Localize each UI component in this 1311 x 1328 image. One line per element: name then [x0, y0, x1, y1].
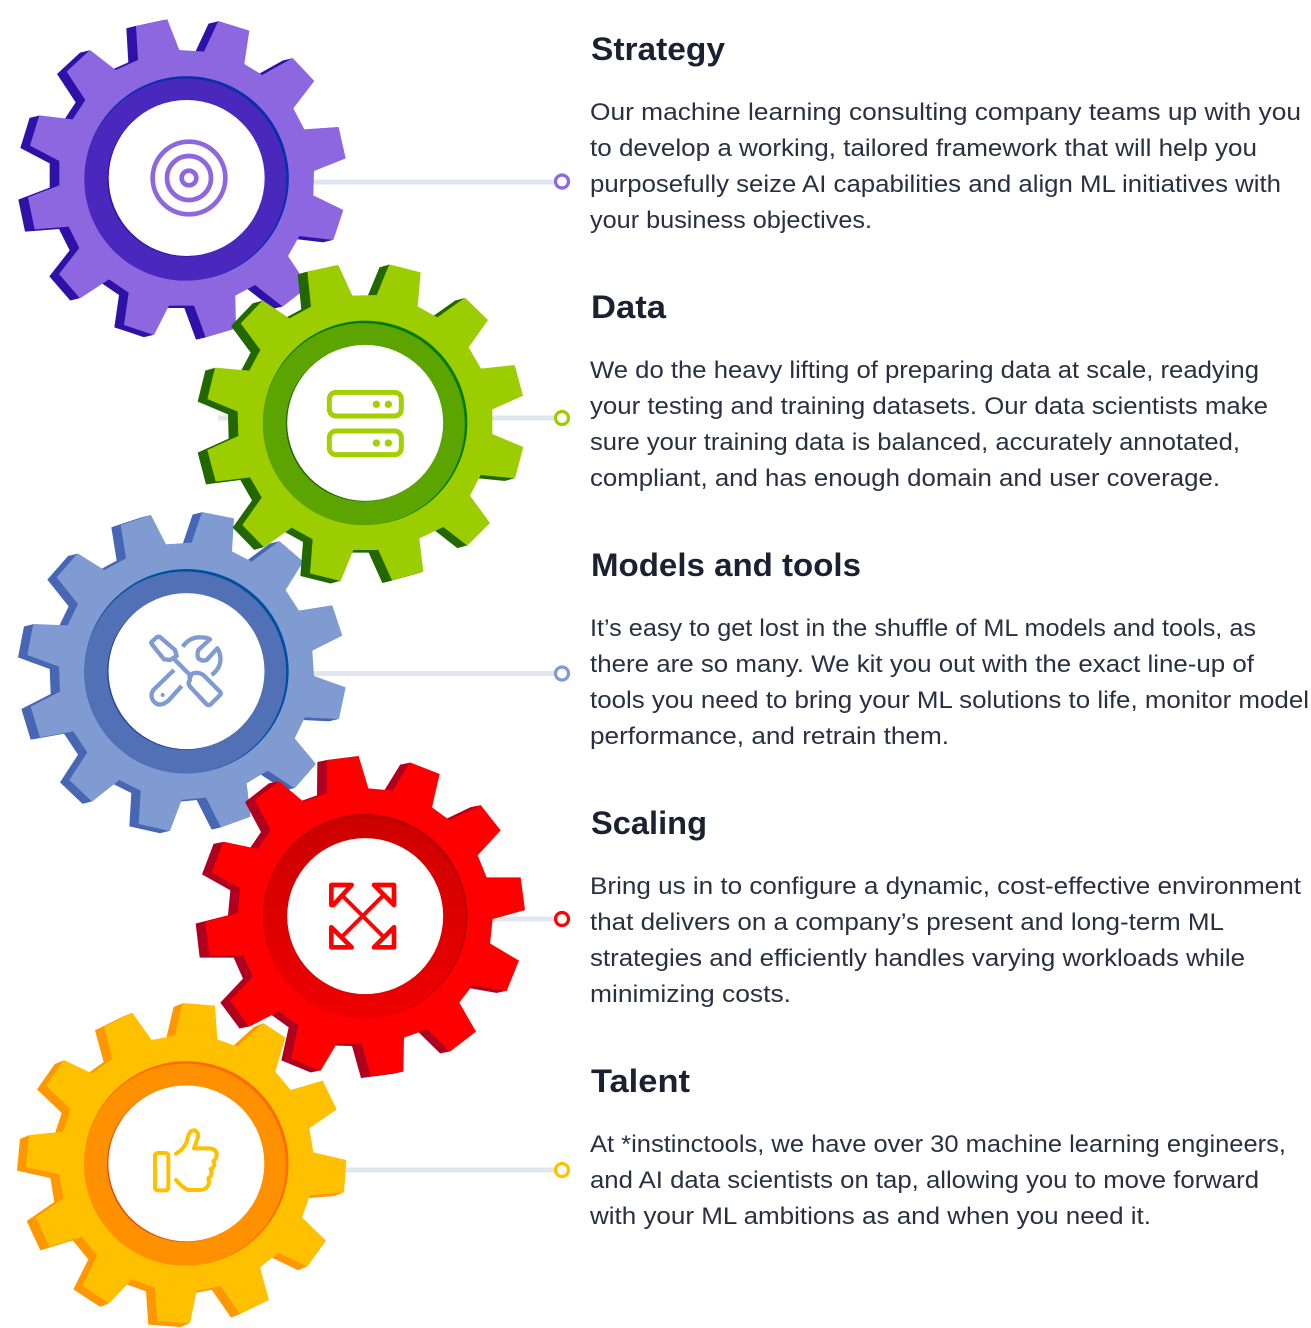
connector: data — [218, 412, 568, 424]
text block: Talent — [589, 1063, 1286, 1230]
heading: Data: Data — [591, 289, 666, 325]
gear: scaling (red) — [196, 756, 525, 1078]
text block: Scaling — [590, 805, 1301, 1008]
paragraph: Scaling: Bring us in to configure a dynamic, cost-effective environment — [590, 873, 1301, 900]
paragraph: Talent: At *instinctools, we have over 30 machine learning engineers, — [590, 1131, 1286, 1158]
paragraph: Talent — [589, 1131, 1286, 1230]
icon: thumbs up — [155, 1130, 217, 1190]
paragraph: Scaling: minimizing costs. — [590, 981, 791, 1008]
paragraph: Talent: with your ML ambitions as and when you need it. — [589, 1203, 1151, 1230]
paragraph: Talent: and AI data scientists on tap, allowing you to move forward — [590, 1167, 1259, 1194]
connector: strategy — [312, 175, 568, 188]
text block: Models and tools — [590, 547, 1309, 750]
paragraph: Models and tools: tools you need to bring your ML solutions to life, monitor model — [590, 687, 1309, 714]
gear: data (green) — [198, 264, 523, 584]
paragraph: Scaling: that delivers on a company’s present and long-term ML — [590, 909, 1224, 936]
icon: wrench and screwdriver — [151, 637, 221, 705]
icon: expand arrows — [331, 885, 394, 947]
heading: Strategy: Strategy — [591, 31, 725, 67]
connector: talent — [340, 1164, 568, 1176]
paragraph: Scaling: strategies and efficiently handles varying workloads while — [590, 945, 1245, 972]
paragraph: Data — [590, 357, 1268, 492]
gear: talent (yellow) — [17, 1003, 346, 1327]
heading: Talent: Talent — [591, 1063, 690, 1099]
paragraph: Strategy — [590, 99, 1301, 234]
paragraph: Scaling — [590, 873, 1301, 1008]
gear: strategy (purple) — [18, 19, 346, 340]
paragraph: Data: sure your training data is balanced, accurately annotated, — [590, 429, 1240, 456]
paragraph: Models and tools: It’s easy to get lost in the shuffle of ML models and tools, as — [590, 615, 1256, 642]
paragraph: Strategy: to develop a working, tailored framework that will help you — [590, 135, 1257, 162]
paragraph: Strategy: purposefully seize AI capabilities and align ML initiatives with — [590, 171, 1281, 198]
heading: Scaling: Scaling — [591, 805, 707, 841]
paragraph: Strategy: your business objectives. — [590, 207, 872, 234]
gear: models and tools (blue) — [18, 512, 346, 833]
heading: Models and tools: Models and tools — [591, 547, 861, 583]
connector: models and tools — [312, 667, 568, 680]
paragraph: Data: compliant, and has enough domain and user coverage. — [590, 465, 1220, 492]
text block: Strategy — [590, 31, 1301, 234]
connector: scaling — [490, 912, 568, 926]
icon: servers — [329, 392, 401, 455]
paragraph: Strategy: Our machine learning consulting company teams up with you — [590, 99, 1301, 126]
paragraph: Models and tools: there are so many. We kit you out with the exact line-up of — [590, 651, 1254, 678]
paragraph: Data: We do the heavy lifting of preparing data at scale, readying — [590, 357, 1259, 384]
paragraph: Data: your testing and training datasets. Our data scientists make — [590, 393, 1268, 420]
text block: Data — [590, 289, 1268, 492]
icon: target — [153, 142, 225, 214]
paragraph: Models and tools: performance, and retrain them. — [590, 723, 949, 750]
paragraph: Models and tools — [590, 615, 1309, 750]
